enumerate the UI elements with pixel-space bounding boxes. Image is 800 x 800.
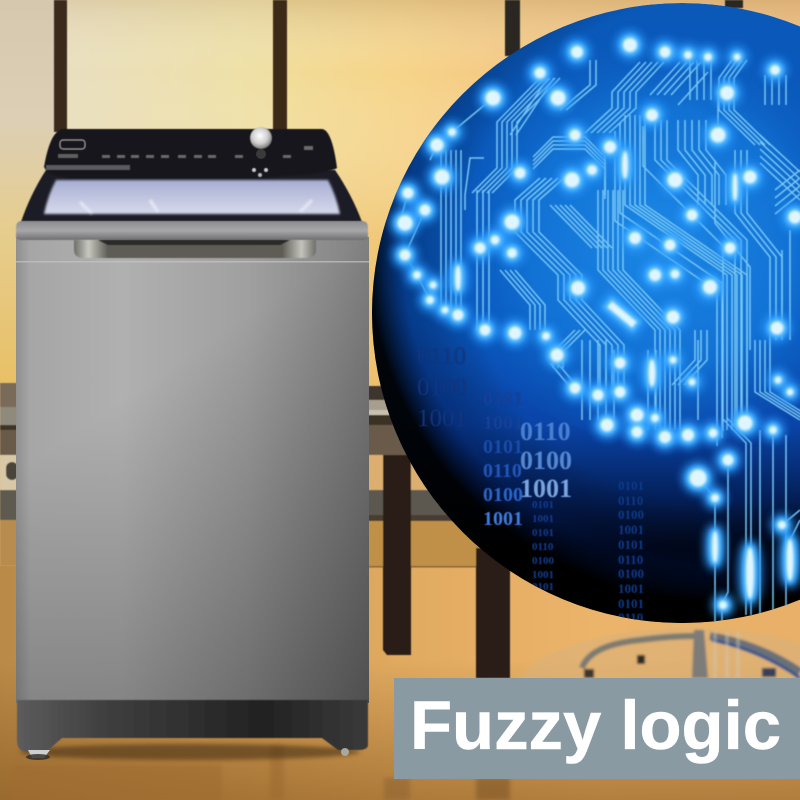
binary digits: 0100 [520, 446, 572, 475]
binary digits: 0101 [483, 388, 523, 410]
binary digits: 1001 [483, 508, 523, 530]
binary digits: 0101 [618, 478, 644, 493]
binary digits: 1001 [532, 513, 554, 525]
binary digits: 0110 [618, 552, 643, 567]
binary digits: 0100 [618, 566, 644, 581]
machine body [16, 237, 369, 703]
binary digits: 0101 [483, 436, 523, 458]
background: window posts [54, 0, 743, 132]
binary digits: 0110 [618, 610, 643, 625]
binary digits: 1001 [532, 569, 554, 581]
lid shell [21, 170, 362, 222]
binary digits: 0110 [618, 493, 643, 508]
binary digits: 0101 [532, 499, 554, 511]
lid glass window [44, 180, 340, 214]
title banner [394, 678, 800, 779]
binary digits: 0100 [618, 507, 644, 522]
machine shadow [20, 744, 360, 760]
control panel [44, 129, 337, 178]
title text: Fuzzy logic [410, 687, 781, 764]
base plinth [17, 700, 368, 752]
glowing nodes [398, 38, 800, 608]
background: table and legs [0, 383, 510, 678]
binary digits: 1001 [618, 522, 644, 537]
binary digits: 0100 [483, 484, 523, 506]
binary digits [417, 343, 644, 625]
washing machine [16, 127, 369, 760]
control knob [250, 127, 272, 149]
binary digits: 1001 [618, 581, 644, 596]
panel display markings [46, 140, 313, 177]
upper strip divider [16, 261, 369, 262]
background: floor reflections [12, 745, 510, 800]
binary digits: 0101 [532, 581, 554, 593]
background: chair base reflection [510, 628, 800, 772]
sphere base [370, 0, 800, 630]
binary digits: 1001 [417, 405, 467, 432]
binary digits: 0101 [532, 527, 554, 539]
binary digits: 0110 [483, 460, 522, 482]
circuit traces [400, 60, 800, 622]
binary digits: 0100 [532, 555, 554, 567]
circuit brain sphere [370, 0, 800, 630]
binary digits: 0110 [417, 343, 466, 370]
top silver band [16, 221, 368, 240]
background: floor [0, 566, 800, 800]
binary digits: 1001 [483, 412, 523, 434]
binary digits: 0110 [520, 417, 571, 446]
binary digits: 0110 [532, 541, 554, 553]
binary digits: 0100 [417, 374, 467, 401]
binary digits: 0101 [618, 596, 644, 611]
handle recess [74, 240, 316, 258]
binary digits: 1001 [520, 474, 572, 503]
binary digits: 0101 [618, 537, 644, 552]
feet [26, 748, 349, 760]
